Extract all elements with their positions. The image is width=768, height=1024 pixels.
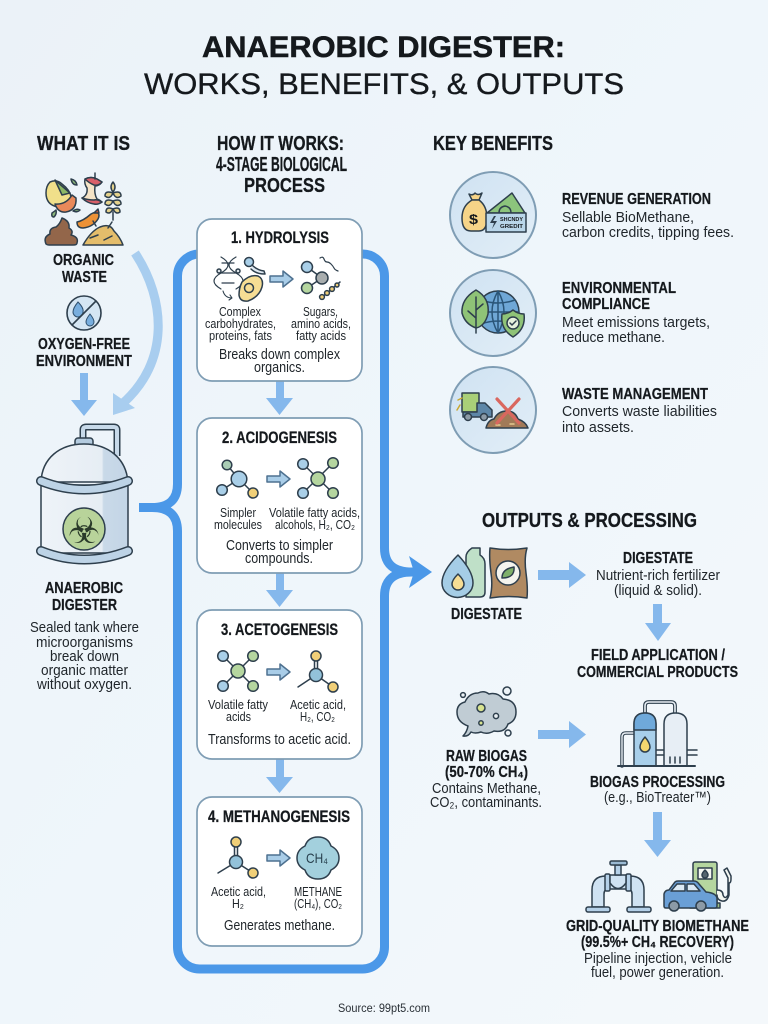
labels: acidogenesis output: alcohols, H₂, CO₂	[275, 517, 355, 532]
arrow: stage 2 to 3	[266, 573, 293, 607]
description: methanogenesis: Generates methane.	[224, 917, 335, 934]
description: digester: Sealed tank where	[30, 619, 139, 636]
description: digester: without oxygen.	[36, 676, 132, 693]
card: hydrolysis	[197, 219, 362, 381]
icon: biogas processing	[618, 702, 697, 766]
text: field application: FIELD APPLICATION /	[591, 647, 726, 664]
card: acidogenesis	[197, 418, 362, 573]
labels: methanogenesis input: H₂	[232, 896, 244, 911]
description: acetogenesis: Transforms to acetic acid.	[208, 731, 351, 748]
heading: hydrolysis: 1. HYDROLYSIS	[231, 228, 329, 247]
text: biomethane: (99.5%+ CH₄ RECOVERY)	[581, 934, 734, 951]
text: digestate: Nutrient-rich fertilizer	[596, 567, 720, 584]
text: raw biogas: (50-70% CH₄)	[445, 764, 528, 781]
label: anaerobic digester: DIGESTER	[52, 597, 117, 614]
icon: environmental compliance	[450, 270, 536, 356]
text: biomethane: fuel, power generation.	[591, 964, 724, 981]
description: acidogenesis: compounds.	[245, 550, 313, 567]
labels: hydrolysis output: amino acids,	[291, 316, 351, 331]
text: environmental compliance: Meet emissions targets,	[562, 314, 710, 331]
source line: Source: 99pt5.com	[338, 1003, 430, 1015]
icon: simpler molecules	[217, 460, 258, 498]
icon: digester tank	[41, 427, 128, 560]
icon: raw biogas	[457, 687, 516, 736]
heading: how it works: 4-STAGE BIOLOGICAL	[216, 154, 347, 176]
labels: hydrolysis input: carbohydrates,	[205, 316, 276, 331]
icon: car and fuel pump	[664, 862, 731, 911]
labels: acidogenesis output: Volatile fatty acids,	[269, 505, 360, 520]
arrow: processing down	[644, 812, 671, 857]
heading: acetogenesis: 3. ACETOGENESIS	[221, 620, 338, 639]
icon: oxygen-free	[67, 296, 101, 330]
text: revenue generation: carbon credits, tipping fees.	[562, 224, 734, 241]
text: biogas processing: BIOGAS PROCESSING	[590, 774, 725, 791]
text: raw biogas	[430, 748, 542, 811]
labels: methanogenesis input	[211, 884, 266, 911]
description: hydrolysis: organics.	[254, 359, 305, 376]
icon: arrow	[267, 664, 290, 680]
icon: sugars and acids	[302, 257, 340, 299]
heading: acidogenesis: 2. ACIDOGENESIS	[222, 428, 337, 447]
text: field application	[577, 647, 738, 681]
card: methanogenesis	[197, 797, 362, 946]
heading: outputs and processing: OUTPUTS & PROCESSING	[482, 510, 697, 532]
text: raw biogas: Contains Methane,	[432, 780, 541, 797]
icon: pipeline valve	[586, 861, 651, 912]
labels: acetogenesis output: Acetic acid,	[290, 697, 346, 712]
label: oxygen-free environment: OXYGEN-FREE	[38, 336, 130, 353]
icon: methane cloud: CH₄	[306, 850, 328, 866]
labels: methanogenesis output	[294, 884, 342, 911]
label: organic waste: ORGANIC	[53, 252, 114, 269]
labels: acetogenesis input: acids	[226, 709, 251, 724]
label: organic waste: WASTE	[62, 269, 107, 286]
icon: acetic acid	[218, 837, 258, 878]
arrow: digestate right	[538, 562, 586, 588]
heading: how it works: PROCESS	[244, 175, 325, 197]
label: organic waste	[53, 252, 114, 286]
labels: hydrolysis input: proteins, fats	[209, 328, 272, 343]
label: anaerobic digester	[45, 580, 123, 614]
panel: what it is	[30, 133, 158, 693]
icon: digestate	[442, 548, 527, 598]
icon: waste management	[450, 367, 536, 453]
text: revenue generation: REVENUE GENERATION	[562, 191, 711, 208]
text: digestate	[596, 550, 720, 599]
text: environmental compliance: ENVIRONMENTAL	[562, 280, 676, 297]
labels: methanogenesis input: Acetic acid,	[211, 884, 266, 899]
label: oxygen-free environment: ENVIRONMENT	[36, 353, 132, 370]
labels: acidogenesis input: molecules	[214, 517, 262, 532]
arrow: waste to tank	[113, 253, 158, 415]
icon: acetic acid	[298, 651, 338, 692]
description: digester: microorganisms	[36, 634, 133, 651]
description: hydrolysis	[219, 346, 340, 376]
text: environmental compliance: reduce methane.	[562, 329, 665, 346]
text: waste management: WASTE MANAGEMENT	[562, 386, 708, 403]
text: biogas processing	[590, 774, 725, 806]
brace frame around stages	[139, 254, 432, 969]
heading: key benefits: KEY BENEFITS	[433, 133, 553, 155]
arrow: stage 1 to 2	[266, 381, 293, 415]
arrow: digestate down	[645, 604, 671, 641]
labels: hydrolysis output: fatty acids	[296, 328, 346, 343]
labels: hydrolysis input	[205, 304, 276, 343]
labels: acidogenesis output	[269, 505, 360, 532]
labels: methanogenesis output: METHANE	[294, 884, 342, 899]
description: acidogenesis	[226, 537, 333, 567]
description: hydrolysis: Breaks down complex	[219, 346, 340, 363]
text: digestate: DIGESTATE	[623, 550, 693, 567]
labels: acetogenesis output	[290, 697, 346, 724]
heading: how it works	[216, 133, 347, 197]
panel: how it works	[197, 133, 362, 946]
title	[144, 31, 624, 101]
icon: revenue: $	[469, 211, 478, 227]
icon: arrow	[270, 271, 293, 287]
heading: how it works: HOW IT WORKS:	[217, 133, 344, 155]
icon: arrow	[267, 471, 290, 487]
heading: what it is: WHAT IT IS	[37, 133, 130, 155]
labels: hydrolysis output: Sugars,	[303, 304, 338, 319]
label: digestate icon: DIGESTATE	[451, 606, 522, 623]
text: raw biogas: RAW BIOGAS	[446, 748, 527, 765]
text: revenue generation: Sellable BioMethane,	[562, 209, 694, 226]
labels: acidogenesis input	[214, 505, 262, 532]
labels: acidogenesis input: Simpler	[220, 505, 257, 520]
description: acidogenesis: Converts to simpler	[226, 537, 333, 554]
icon: digester tank: ☣	[68, 511, 100, 552]
label: anaerobic digester: ANAEROBIC	[45, 580, 123, 597]
text: environmental compliance	[562, 280, 710, 346]
icon: revenue: GREDIT	[500, 224, 524, 230]
labels: acetogenesis output: H₂, CO₂	[300, 709, 335, 724]
title: ANAEROBIC DIGESTER:	[202, 31, 565, 64]
label: oxygen-free environment	[36, 336, 132, 370]
description: digester	[30, 619, 139, 693]
labels: acetogenesis input: Volatile fatty	[208, 697, 268, 712]
labels: methanogenesis output: (CH₄), CO₂	[294, 896, 342, 911]
icon: organic waste	[45, 173, 123, 245]
icon: arrow	[267, 850, 290, 866]
text: revenue generation	[562, 191, 734, 241]
text: raw biogas: CO₂, contaminants.	[430, 794, 542, 811]
title: WORKS, BENEFITS, & OUTPUTS	[144, 68, 624, 101]
icon: complex organics	[214, 257, 265, 301]
text: environmental compliance: COMPLIANCE	[562, 296, 650, 313]
panel: outputs and processing	[430, 510, 749, 981]
text: biomethane	[566, 918, 749, 981]
heading: methanogenesis: 4. METHANOGENESIS	[208, 807, 350, 826]
text: waste management: Converts waste liabilities	[562, 403, 717, 420]
icon: revenue	[450, 172, 536, 258]
text: waste management: into assets.	[562, 419, 634, 436]
arrow: environment to tank	[71, 373, 97, 416]
labels: hydrolysis input: Complex	[219, 304, 261, 319]
text: digestate: (liquid & solid).	[614, 582, 702, 599]
labels: hydrolysis output	[291, 304, 351, 343]
description: digester: organic matter	[41, 662, 128, 679]
icon: revenue: SHCNDY	[500, 217, 523, 223]
panel: key benefits	[433, 133, 734, 453]
arrow: stage 3 to 4	[266, 759, 293, 793]
text: waste management	[562, 386, 717, 436]
text: biogas processing: (e.g., BioTreater™)	[604, 789, 711, 806]
icon: volatile fatty acids	[218, 651, 258, 691]
description: digester: break down	[50, 648, 119, 665]
arrow: biogas right	[538, 721, 586, 748]
icon: volatile fatty acids	[298, 458, 338, 498]
labels: acetogenesis input	[208, 697, 268, 724]
text: biomethane: Pipeline injection, vehicle	[584, 950, 732, 967]
card: acetogenesis	[197, 610, 362, 759]
icon: methane cloud	[297, 837, 339, 879]
